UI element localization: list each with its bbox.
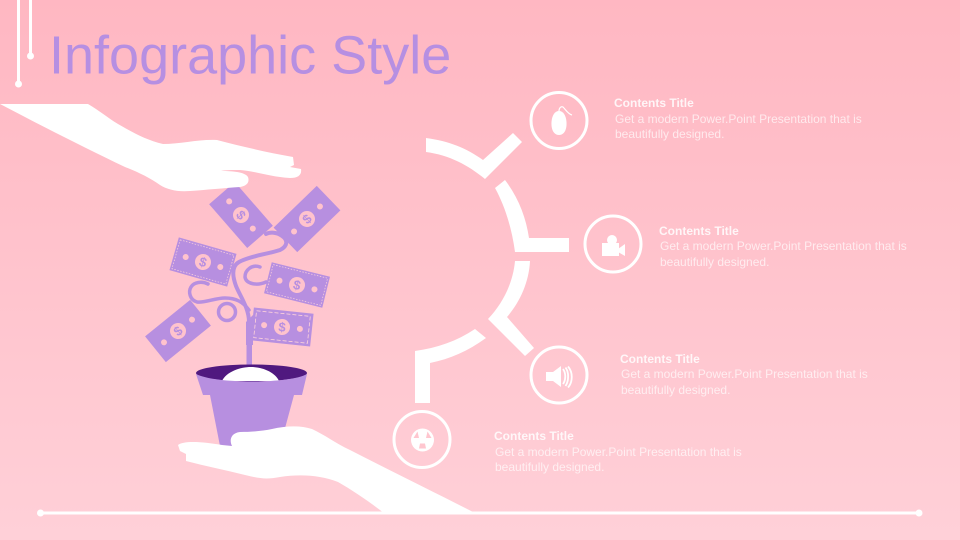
flower pot — [196, 364, 307, 449]
bill: lower right — [250, 307, 314, 347]
bill: lower left — [145, 300, 211, 362]
node 1: mouse icon — [531, 92, 587, 148]
text block 1 — [614, 96, 862, 141]
arc segment 3 with arm — [488, 261, 534, 356]
bill: middle left: $ — [197, 254, 209, 270]
bill: top left — [209, 182, 273, 248]
bill: lower right: $ — [278, 319, 287, 335]
bill: top left: $ — [233, 207, 250, 223]
bill: top right — [274, 186, 340, 252]
text block 4: Contents Title — [494, 429, 574, 443]
bill: middle right — [264, 262, 330, 308]
bill: lower left: $ — [170, 322, 186, 339]
text block 2: Contents Title — [659, 224, 739, 238]
bill: middle right: $ — [292, 277, 303, 293]
node 4: radiation icon — [394, 412, 450, 468]
text block 3: beautifully designed. — [621, 383, 730, 397]
text block 2 — [659, 224, 907, 269]
decorative corner lines — [16, 0, 34, 87]
node 3: speaker icon — [531, 347, 587, 403]
text block 4 — [494, 429, 742, 474]
text block 3: Contents Title — [620, 352, 700, 366]
hand: top — [0, 104, 301, 191]
text block 1: beautifully designed. — [615, 127, 724, 141]
arc segment 1 with arrow arm — [426, 133, 522, 179]
bill: middle left — [169, 237, 237, 287]
text block 3 — [620, 352, 868, 397]
text block 4: beautifully designed. — [495, 460, 604, 474]
text block 1: Contents Title — [614, 96, 694, 110]
title: Infographic Style — [49, 26, 451, 86]
text block 2: beautifully designed. — [660, 255, 769, 269]
text block 3: Get a modern Power.Point Presentation that is — [621, 367, 868, 381]
node 2: video camera icon — [585, 216, 641, 272]
hand: bottom — [178, 426, 477, 514]
text block 2: Get a modern Power.Point Presentation that is — [660, 239, 907, 253]
bottom rule with end dots — [37, 510, 922, 516]
text block 4: Get a modern Power.Point Presentation that is — [495, 445, 742, 459]
vines — [190, 233, 286, 368]
arc segment 2 with arm — [495, 180, 569, 252]
illustration: money plant between hands — [0, 92, 922, 516]
text block 1: Get a modern Power.Point Presentation that is — [615, 112, 862, 126]
bill: top right: $ — [299, 211, 315, 227]
arc segment 4 with arm — [415, 329, 486, 403]
